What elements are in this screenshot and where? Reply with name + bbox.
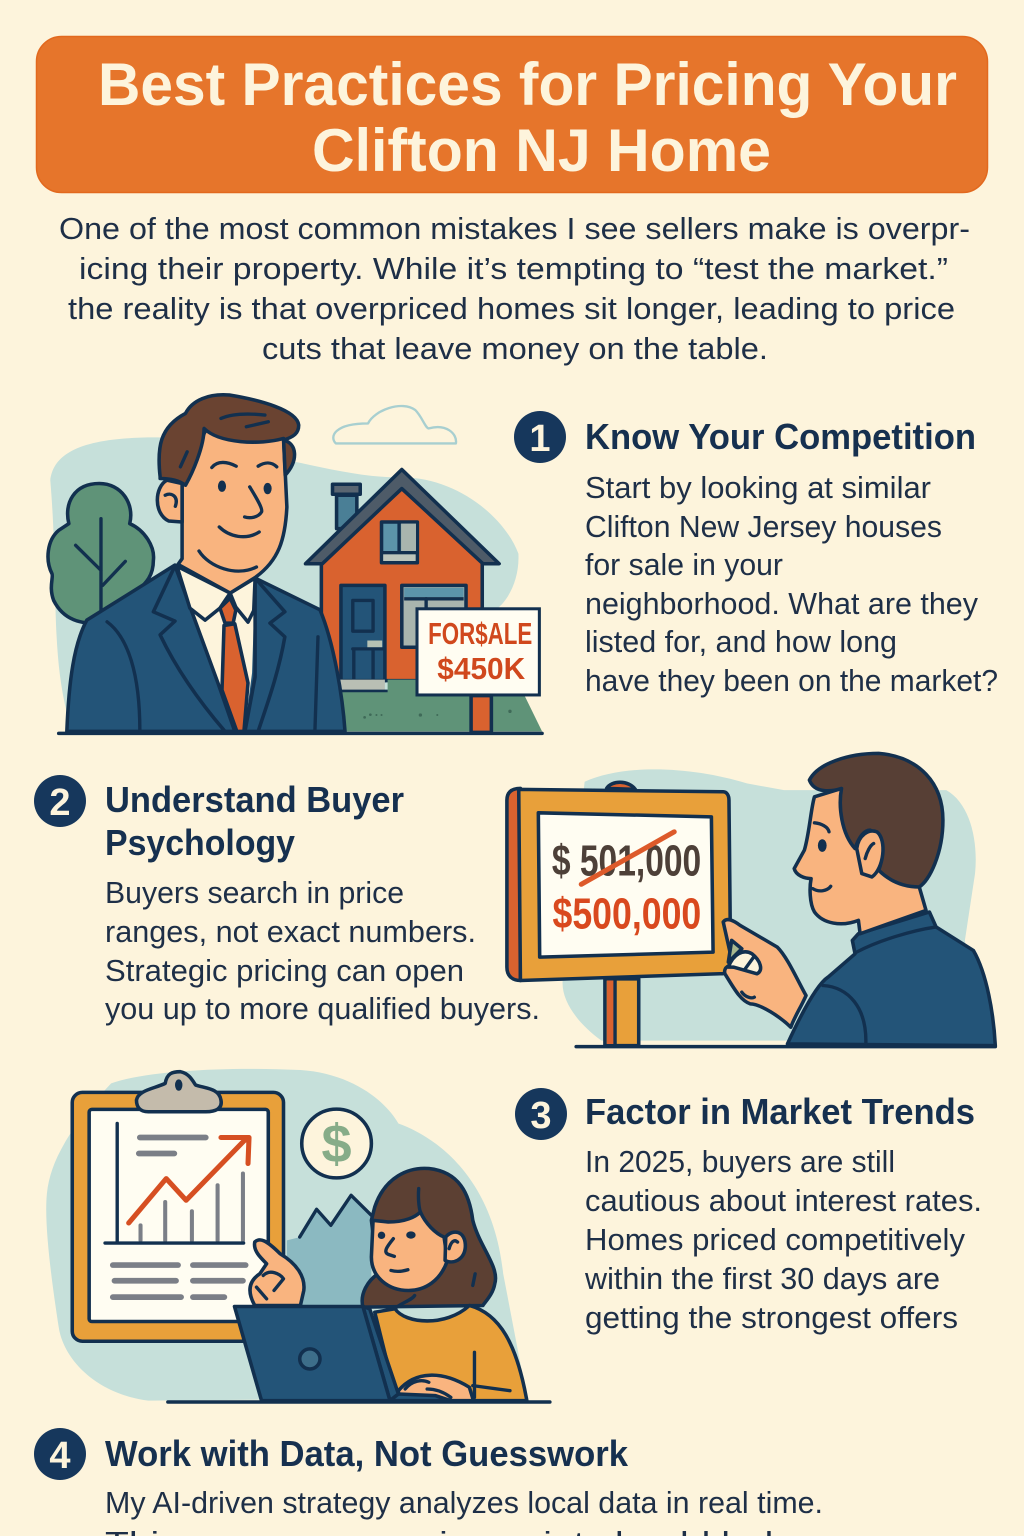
- price sign: $500,000: [553, 890, 701, 939]
- section 3: factor in market trends: 3: [530, 1095, 552, 1137]
- section 3: factor in market trends: cautious about interest rates.: [585, 1183, 982, 1218]
- agent figure: [67, 395, 345, 731]
- section 1: know your competition: Clifton New Jersey houses: [585, 509, 942, 544]
- intro paragraph: cuts that leave money on the table.: [262, 331, 768, 366]
- title banner: [36, 36, 988, 192]
- icon: dollar coin: $: [322, 1114, 352, 1174]
- section 2: understand buyer psychology: Understand Buyer: [105, 779, 404, 820]
- price sign: $ 501,000: [552, 837, 701, 885]
- house: [305, 470, 542, 731]
- collar: [177, 566, 230, 620]
- section 3: factor in market trends: [515, 1088, 982, 1335]
- section 3: factor in market trends: getting the strongest offers: [585, 1300, 958, 1335]
- section 3: factor in market trends: within the first 30 days are: [584, 1261, 940, 1296]
- section 2: understand buyer psychology: Psychology: [105, 822, 295, 863]
- lapels: [153, 566, 235, 731]
- title banner: Best Practices for Pricing Your: [98, 51, 957, 118]
- clipboard with growth chart: [72, 1072, 284, 1341]
- suit: [67, 565, 345, 731]
- illustration: man pointing at price sign: [507, 753, 995, 1047]
- icon: cloud: [333, 406, 456, 443]
- section 1: know your competition: Know Your Competition: [585, 416, 976, 457]
- section 4: work with data: [34, 1428, 823, 1536]
- for sale sign: FOR$ALE: [428, 616, 532, 651]
- shirt: [177, 567, 255, 727]
- section 1: know your competition: neighborhood. What are they: [585, 586, 978, 621]
- section 2: understand buyer psychology: you up to more qualified buyers.: [105, 991, 540, 1026]
- section 4: work with data: 4: [49, 1435, 71, 1477]
- section 3: factor in market trends: Homes priced competitively: [585, 1222, 965, 1257]
- section 4: work with data: Work with Data, Not Guesswork: [105, 1433, 629, 1474]
- for sale sign: $450K: [437, 651, 526, 686]
- section 2: understand buyer psychology: Buyers search in price: [105, 875, 404, 910]
- section 1: know your competition: Start by looking at similar: [585, 470, 931, 505]
- price sign: [507, 782, 731, 1046]
- section 1: know your competition: have they been on the market?: [585, 663, 998, 698]
- mountain chart: [287, 1195, 371, 1307]
- intro paragraph: the reality is that overpriced homes sit longer, leading to price: [68, 291, 955, 326]
- section 3: factor in market trends: In 2025, buyers are still: [585, 1144, 895, 1179]
- intro paragraph: icing their property. While it’s tempting to “test the market.”: [79, 251, 948, 286]
- section 2: understand buyer psychology: ranges, not exact numbers.: [105, 914, 476, 949]
- tie: [222, 624, 248, 731]
- section 2: understand buyer psychology: Strategic pricing can open: [105, 953, 464, 988]
- intro paragraph: One of the most common mistakes I see sellers make is overpr-: [59, 211, 970, 246]
- title banner: Clifton NJ Home: [312, 117, 771, 184]
- section 1: know your competition: [514, 411, 998, 698]
- illustration: woman with chart and laptop: [46, 1069, 550, 1402]
- section 4: work with data: My AI-driven strategy analyzes local data in real time.: [105, 1485, 823, 1520]
- section 1: know your competition: for sale in your: [585, 547, 783, 582]
- for sale sign: [417, 609, 539, 732]
- section 2: understand buyer psychology: [34, 775, 540, 1026]
- illustration: agent with house for sale: [48, 395, 542, 733]
- woman figure: [250, 1168, 527, 1401]
- section 2: understand buyer psychology: 2: [49, 782, 71, 824]
- section 1: know your competition: 1: [529, 418, 551, 460]
- man figure: [723, 753, 995, 1046]
- intro paragraph: [59, 211, 970, 366]
- section 3: factor in market trends: Factor in Market Trends: [585, 1091, 975, 1132]
- icon: dollar coin: [302, 1109, 371, 1178]
- icon: tree: [48, 484, 154, 624]
- laptop: [234, 1306, 451, 1401]
- section 1: know your competition: listed for, and how long: [585, 624, 897, 659]
